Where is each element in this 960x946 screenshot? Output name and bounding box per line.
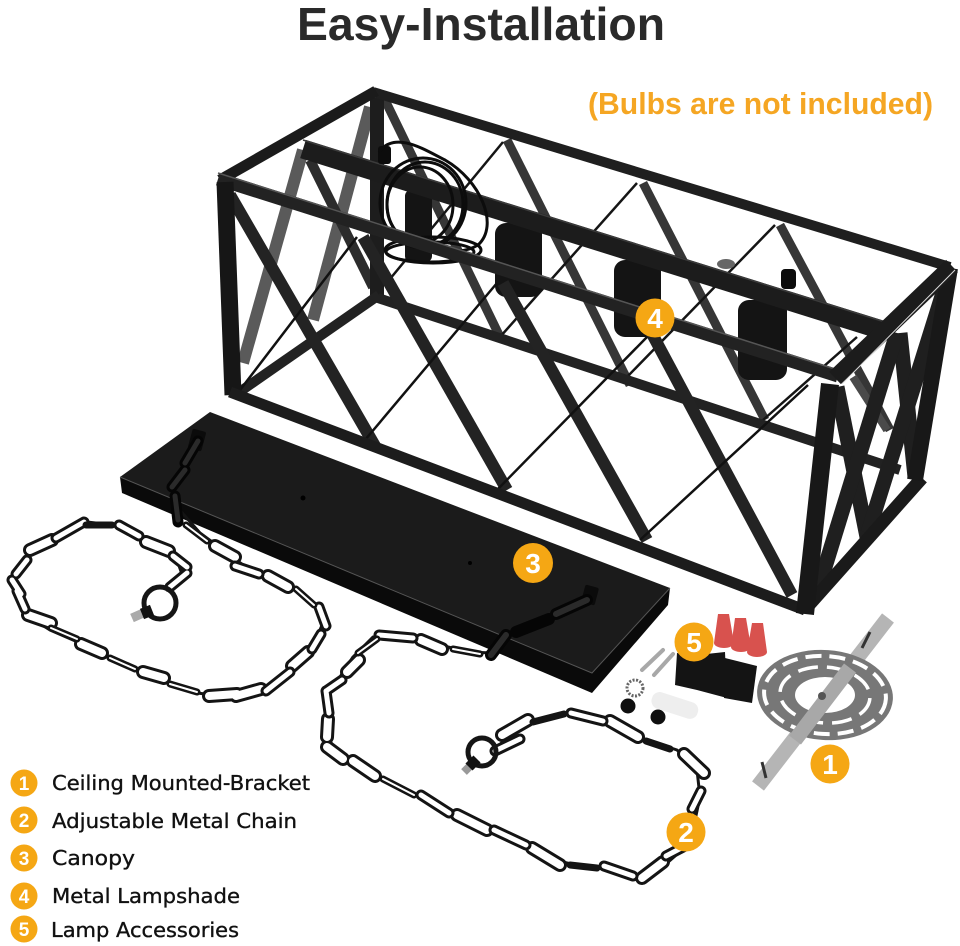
badge 4 [636, 298, 674, 338]
front bottom rail [230, 392, 805, 610]
lamp sockets [405, 190, 787, 380]
badge 2: 2 [678, 817, 694, 848]
badge 1: 1 [822, 749, 838, 780]
metal lampshade cage [218, 91, 955, 614]
front face wires [240, 237, 808, 540]
cap nuts [620, 698, 636, 714]
back left post [370, 98, 384, 295]
legend [10, 770, 310, 942]
lock washer [627, 680, 643, 696]
back top rail [373, 92, 950, 267]
legend item 4: Metal Lampshade [52, 884, 240, 908]
front right post [805, 384, 830, 614]
front face straps [230, 195, 792, 595]
canopy plate [120, 412, 670, 693]
legend item 1: 1 [19, 774, 30, 795]
bar fittings [378, 146, 796, 289]
gasket [649, 690, 700, 721]
badge 4: 4 [647, 303, 663, 334]
ceiling mounted bracket [754, 618, 896, 786]
left face straps [243, 107, 370, 363]
heat shrink sleeves [675, 652, 757, 703]
right face straps [817, 280, 947, 593]
badge 1 [810, 744, 850, 784]
badge 3: 3 [525, 548, 541, 579]
legend item 3: 3 [19, 849, 29, 870]
legend item 2: 2 [19, 811, 29, 832]
badge 3 [513, 543, 553, 583]
legend item 5 [10, 916, 239, 942]
right bottom rail [808, 478, 922, 606]
legend item 2: Adjustable Metal Chain [52, 809, 297, 833]
legend item 5: 5 [19, 920, 30, 941]
left adjustable chain [12, 441, 326, 697]
back right post [915, 268, 950, 480]
left bottom rail [238, 295, 379, 393]
front top rail [218, 179, 838, 376]
badge 5: 5 [686, 627, 702, 658]
legend item 4 [10, 882, 240, 910]
note: bulbs not included: (Bulbs are not included) [588, 86, 933, 121]
lamp accessories [620, 614, 767, 724]
back face straps and wires [385, 100, 890, 430]
wire nuts [714, 614, 767, 657]
right top rail [835, 266, 952, 378]
badge 5 [674, 622, 714, 662]
right adjustable chain [326, 600, 704, 880]
legend item 4: 4 [19, 887, 30, 908]
legend item 1: Ceiling Mounted-Bracket [52, 771, 310, 795]
legend item 3: Canopy [52, 846, 135, 870]
front left post [225, 182, 233, 395]
screws [642, 650, 673, 675]
legend item 3 [10, 844, 135, 872]
coiled power cord [379, 142, 487, 263]
badge 2 [666, 812, 706, 852]
back bottom rail [378, 298, 900, 470]
centre mounting bar [303, 149, 885, 331]
legend item 5: Lamp Accessories [51, 918, 239, 942]
left top rail [220, 91, 376, 180]
